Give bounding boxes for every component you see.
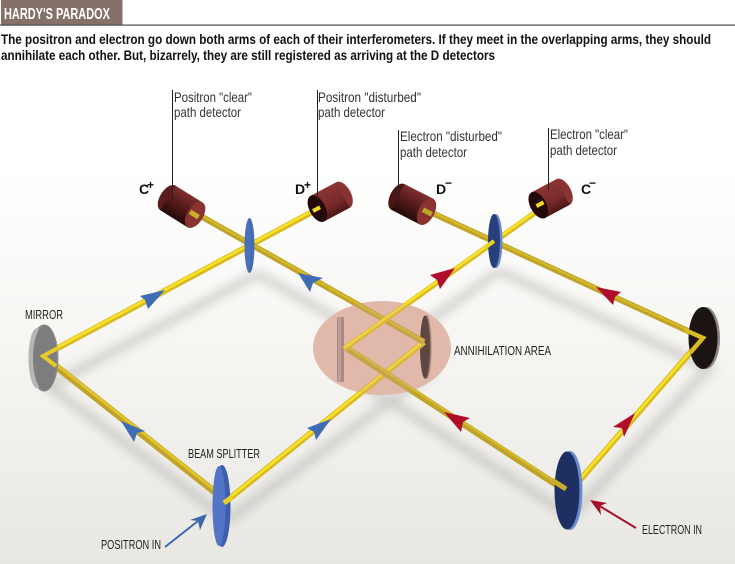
label: positron disturbed detector: Positron "disturbed" <box>318 89 421 105</box>
detector symbols <box>139 176 596 197</box>
detector symbols: − <box>445 176 452 190</box>
overlap tint <box>313 301 451 395</box>
intro text <box>1 31 711 63</box>
label: annihilation area: ANNIHILATION AREA <box>454 343 551 358</box>
label: positron disturbed detector: path detector <box>318 104 385 120</box>
arrow: positron in <box>165 514 207 547</box>
label: positron disturbed detector <box>318 89 421 120</box>
annihilation area <box>313 301 451 395</box>
positron lower left arm <box>43 354 216 493</box>
detector: D+ <box>304 178 357 225</box>
electron right arm <box>580 337 703 480</box>
beam paths <box>43 206 703 503</box>
arrowheads: electron <box>430 268 635 437</box>
detector: C- <box>524 175 577 222</box>
arrow: electron in <box>590 500 636 528</box>
intro text: annihilate each other. But, bizarrely, they are still registered as arriving at the D detectors <box>1 47 495 63</box>
beam splitter: lower positron <box>212 465 230 547</box>
label: electron in: ELECTRON IN <box>642 522 702 537</box>
leader lines <box>172 90 548 200</box>
label: electron clear detector: Electron "clear" <box>550 126 628 142</box>
detector: C+ <box>154 181 210 231</box>
beam over lower positron splitter <box>224 497 232 503</box>
beam ends on right mirror <box>685 330 703 353</box>
detector symbols: + <box>304 178 311 192</box>
electron arm to clear detector <box>344 206 543 349</box>
mirror: left <box>28 324 58 392</box>
electron lower arm <box>345 345 566 491</box>
label: electron disturbed detector <box>400 128 502 160</box>
detector symbols: C <box>139 181 149 197</box>
positron upper left arm <box>43 209 316 356</box>
header bar: HARDY'S PARADOX <box>4 6 110 23</box>
detector symbols: − <box>589 176 596 190</box>
beam shadows <box>49 271 709 520</box>
label: positron in: POSITRON IN <box>101 537 161 552</box>
mirror: annihilation left <box>337 317 344 382</box>
detector symbols: + <box>147 178 154 192</box>
beam splitter: upper electron <box>488 214 502 268</box>
beam splitter: lower electron <box>554 451 582 530</box>
detector symbols: D <box>295 181 305 197</box>
detector symbols: D <box>436 181 446 197</box>
mirror: annihilation right <box>420 315 432 379</box>
label: electron disturbed detector: Electron "disturbed" <box>400 128 502 144</box>
arrowheads: positron <box>121 273 331 442</box>
label: electron disturbed detector: path detector <box>400 144 467 160</box>
label: positron clear detector: Positron "clear" <box>174 89 252 105</box>
label: electron clear detector: path detector <box>550 142 617 158</box>
label: positron clear detector: path detector <box>174 104 241 120</box>
header bar <box>0 0 735 26</box>
label: beam splitter: BEAM SPLITTER <box>188 446 260 461</box>
beam splitter: upper positron <box>244 218 254 273</box>
detector symbols: C <box>581 181 591 197</box>
beam over upper electron splitter <box>486 241 494 247</box>
mirror: right <box>688 307 720 369</box>
positron arm to clear detector <box>197 213 424 342</box>
beam over lower electron splitter <box>552 480 566 489</box>
label: electron clear detector <box>550 126 628 158</box>
label: mirror: MIRROR <box>25 307 63 322</box>
detector: D- <box>384 180 440 228</box>
label: positron clear detector <box>174 89 252 120</box>
electron upper right arm <box>430 211 703 338</box>
beam ends on left mirror <box>43 348 58 366</box>
positron right arm <box>224 341 424 503</box>
